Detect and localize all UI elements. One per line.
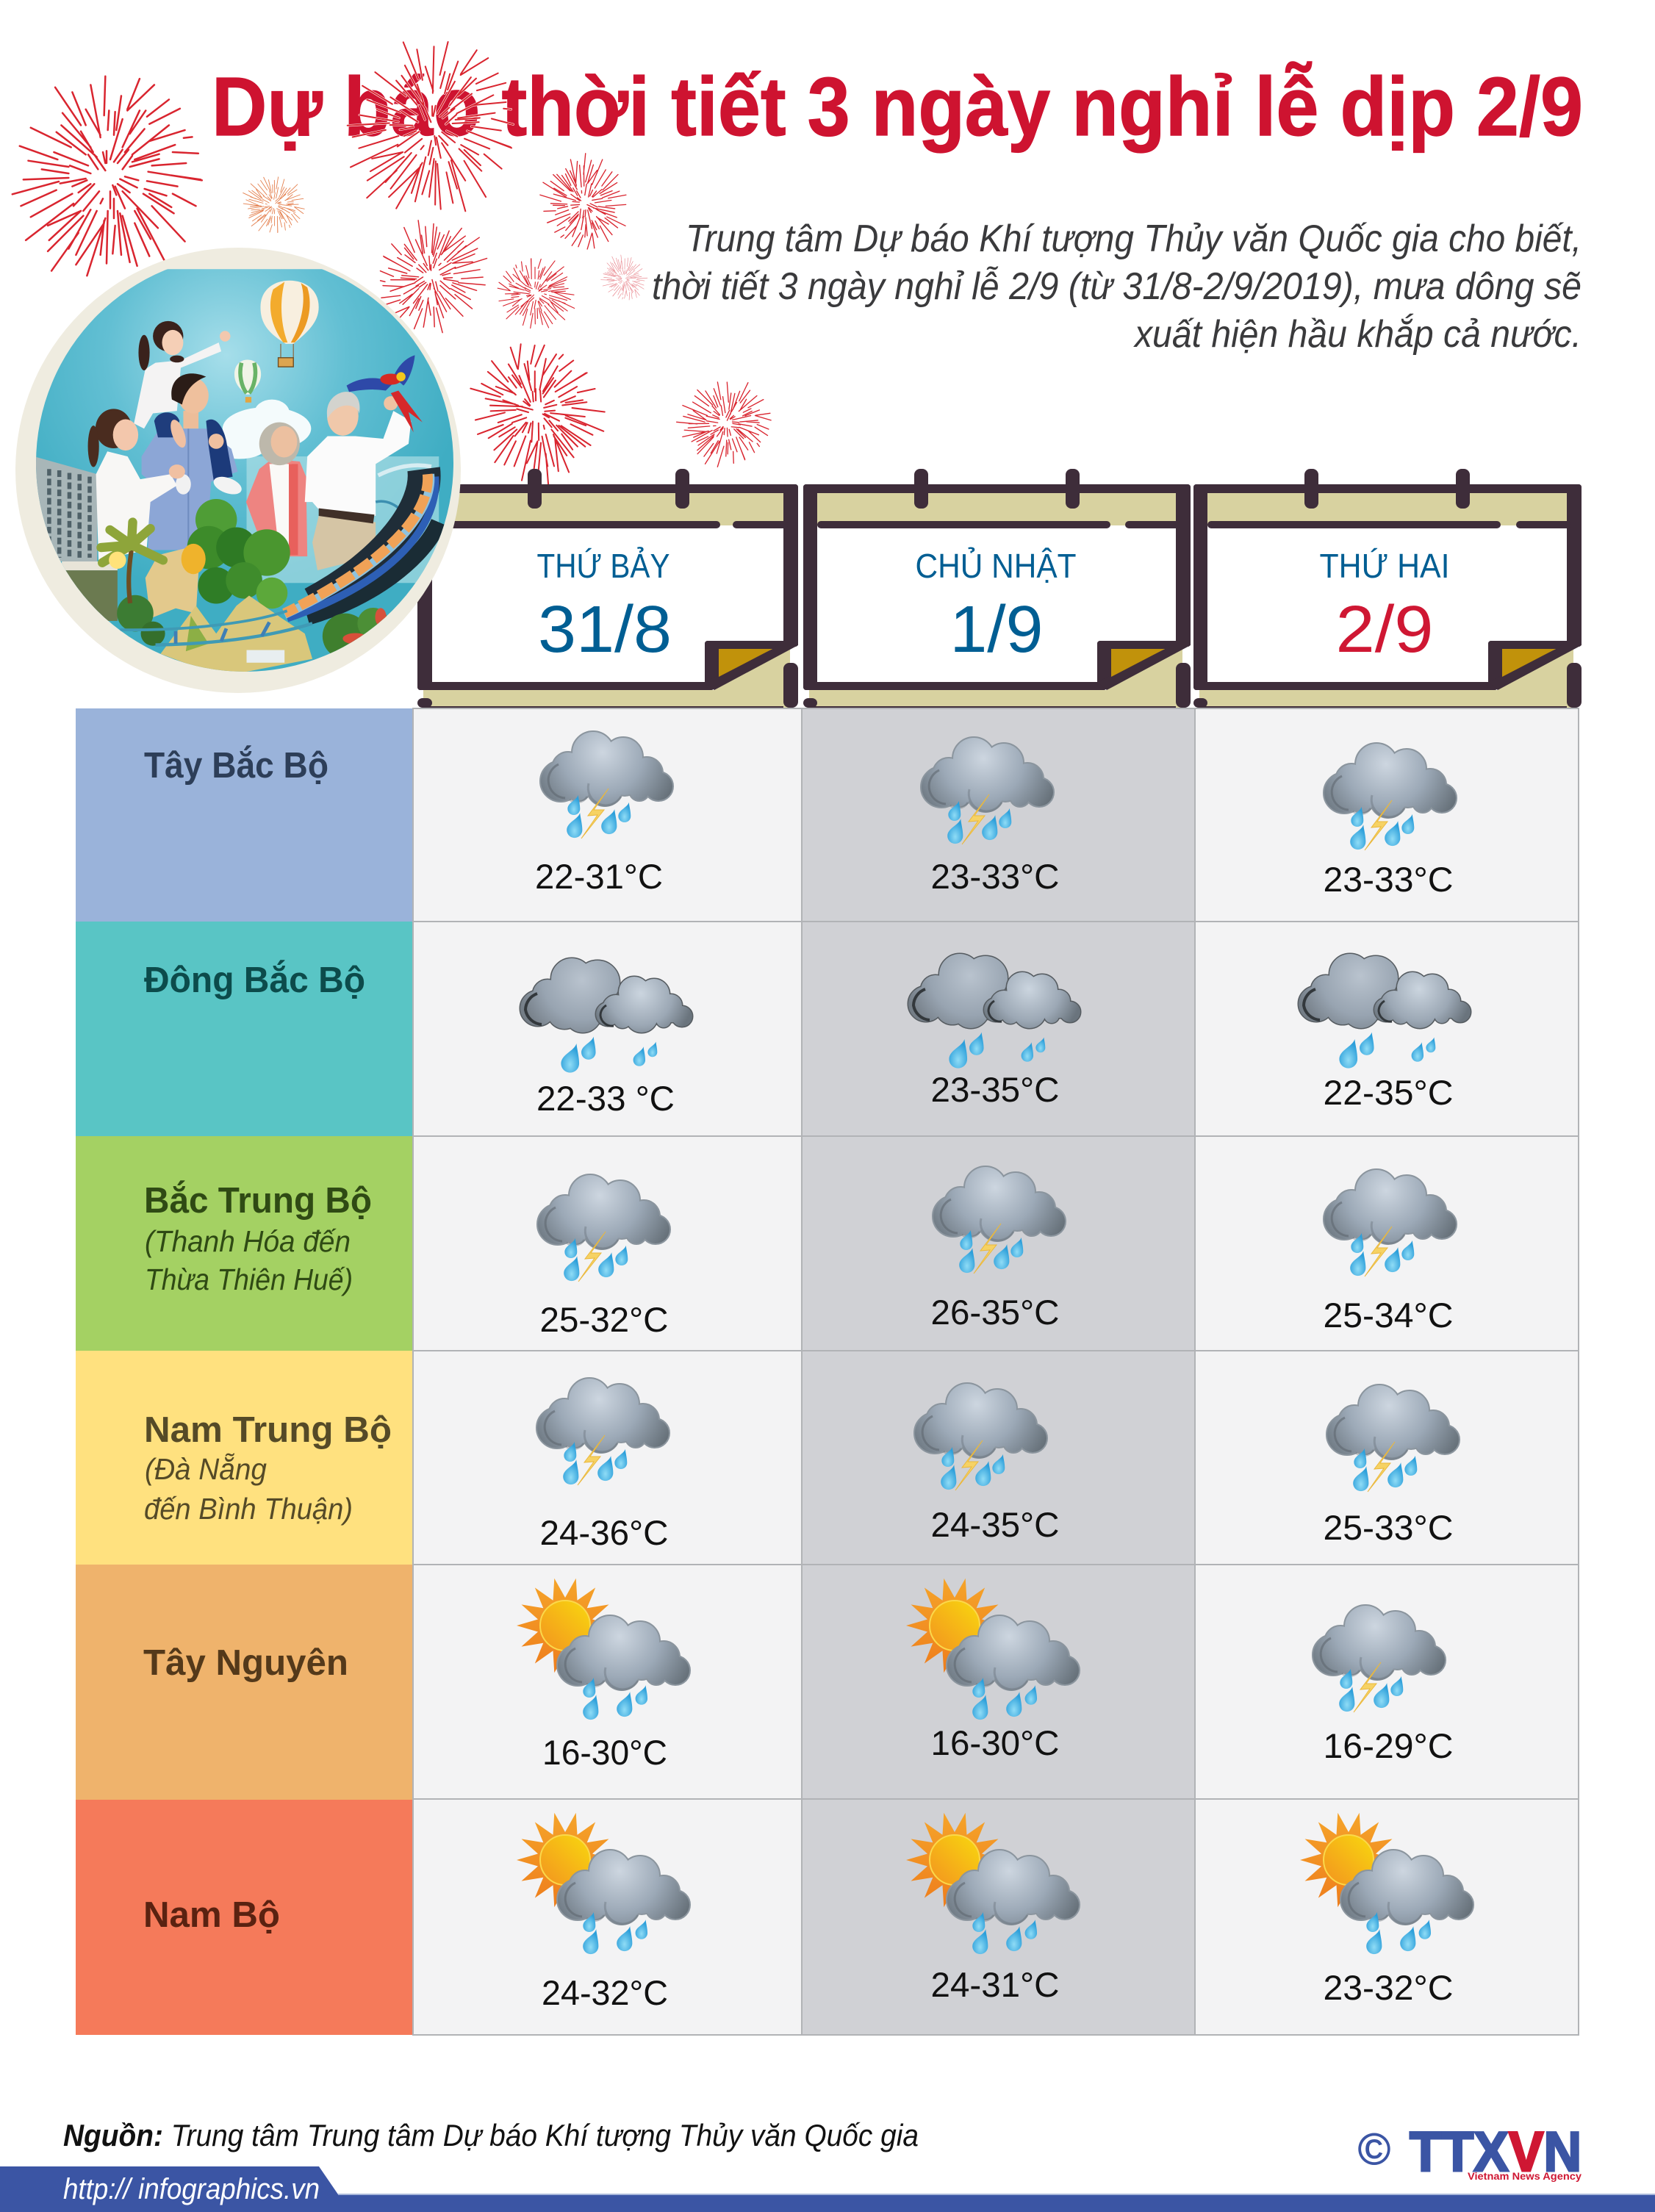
logo copyright: © (1358, 2125, 1390, 2174)
calendar day: Thứ Bảy: THỨ BẢY (536, 547, 670, 585)
icon: rain clouds (520, 958, 692, 1073)
temperatures row 5: 16-30°C (542, 1733, 667, 1772)
temperatures row 3: 25-32°C (539, 1300, 669, 1339)
label: Nam Bộ (76, 1800, 412, 2035)
photo: mother (88, 409, 185, 560)
label: Nam Trung Bộ: đến Bình Thuận) (144, 1492, 353, 1526)
label: Tây Nguyên: Tây Nguyên (143, 1643, 348, 1683)
footer url: http:// infographics.vn (63, 2173, 320, 2205)
calendar: Thứ Hai 2/9 (1193, 469, 1582, 708)
photo: rock and scroll (146, 544, 312, 677)
label: Nam Trung Bộ: Nam Trung Bộ (144, 1410, 392, 1450)
temperatures row 1: 23-33°C (1323, 860, 1454, 899)
label: Đông Bắc Bộ (76, 922, 412, 1136)
label: Tây Nguyên (76, 1565, 412, 1800)
temperatures row 2 (536, 1070, 1454, 1118)
icon: storm (922, 738, 1053, 844)
icon: sun and rain (906, 1579, 1079, 1720)
calendar date: 2/9: 2/9 (1336, 593, 1433, 667)
label: Bắc Trung Bộ: Bắc Trung Bộ (144, 1180, 372, 1221)
calendar: Thứ Bảy 31/8 (417, 469, 798, 708)
intro text (652, 218, 1582, 356)
icon: storm (915, 1384, 1047, 1490)
icon: storm (541, 732, 672, 839)
firework: center small (492, 252, 579, 335)
photo: trees (187, 499, 290, 608)
row labels (76, 708, 412, 2035)
fireworks (12, 25, 785, 505)
temperatures row 4: 24-35°C (930, 1505, 1060, 1544)
calendar day: Chủ Nhật: CHỦ NHẬT (916, 547, 1076, 585)
icons row: Nam Trung Bộ (537, 1379, 1459, 1492)
label: Nam Trung Bộ (76, 1351, 412, 1565)
footer bar (0, 2166, 1655, 2212)
photo: father (142, 373, 244, 550)
photo: rollercoaster (120, 465, 439, 645)
temperatures row 1 (535, 857, 1454, 899)
label: Nam Trung Bộ: (Đà Nẵng (145, 1452, 267, 1486)
icons row: Tây Nguyên (517, 1579, 1445, 1720)
icon: storm (1324, 744, 1456, 850)
temperatures row 4 (539, 1505, 1454, 1552)
logo TTXVN (1358, 2121, 1582, 2183)
photo: large balloon (260, 281, 319, 367)
temperatures row 4: 25-33°C (1323, 1508, 1454, 1547)
temperatures row 2: 22-35°C (1323, 1073, 1454, 1112)
source line: Nguồn: Trung tâm Trung tâm Dự báo Khí tượng Thủy văn Quốc gia (63, 2118, 919, 2152)
temperatures row 4: 24-36°C (539, 1513, 669, 1552)
temperatures row 1: 22-31°C (535, 857, 663, 896)
temperatures row 3 (539, 1293, 1454, 1339)
photo: parrot (347, 355, 423, 432)
icon: sun and rain (1300, 1813, 1473, 1954)
icon: storm (1313, 1606, 1445, 1712)
firework: far left (12, 76, 202, 276)
temperatures row 6: 23-32°C (1323, 1968, 1454, 2007)
firework: upper right (525, 143, 645, 263)
icon: sun and rain (517, 1813, 689, 1954)
firework: above first calendar right (666, 364, 785, 481)
temperatures row 2: 22-33 °C (536, 1079, 675, 1118)
icons row: Đông Bắc Bộ (520, 954, 1471, 1073)
photo: building (34, 456, 97, 563)
icons row: Tây Bắc Bộ (541, 732, 1456, 850)
temperatures row 1: 23-33°C (930, 857, 1060, 896)
photo: girl (134, 321, 230, 428)
icon: storm (1327, 1385, 1459, 1492)
temperatures row 6: 24-32°C (542, 1973, 668, 2012)
icons row: Nam Bộ (517, 1813, 1473, 1954)
icon: rain clouds (908, 954, 1080, 1069)
photo: grandmother (246, 423, 307, 556)
icon: storm (933, 1167, 1065, 1274)
photo: grandfather (305, 392, 411, 570)
temperatures row 2: 23-35°C (930, 1070, 1060, 1109)
icon: storm (1324, 1170, 1456, 1276)
firework: small orange (240, 171, 309, 237)
firework: above first calendar (444, 319, 628, 505)
photo: bottom right greenery (247, 608, 389, 663)
title: Dự báo thời tiết 3 ngày nghỉ lễ dịp 2/9 (212, 60, 1583, 153)
temperatures (535, 857, 1454, 2012)
temperatures row 5: 16-29°C (1323, 1726, 1454, 1765)
icon: storm (537, 1379, 669, 1485)
firework: pale small (594, 248, 654, 308)
intro line 1: Trung tâm Dự báo Khí tượng Thủy văn Quốc gia cho biết, (686, 218, 1582, 260)
calendar day: Thứ Hai: THỨ HAI (1320, 547, 1449, 585)
icon: sun and rain (906, 1813, 1079, 1954)
icon: storm (538, 1175, 669, 1282)
temperatures row 5 (542, 1723, 1454, 1772)
icons row: Bắc Trung Bộ (538, 1167, 1456, 1282)
grid cells (413, 708, 1579, 2035)
temperatures row 6 (542, 1965, 1454, 2012)
firework: over title (333, 25, 531, 229)
intro line 2: thời tiết 3 ngày nghỉ lễ 2/9 (từ 31/8-2/9/2019), mưa dông sẽ (652, 265, 1582, 308)
photo: small balloon (234, 360, 261, 403)
icon: rain clouds (1299, 954, 1471, 1069)
round family photo illustration (15, 248, 461, 693)
calendar date: 31/8: 31/8 (538, 593, 672, 667)
logo tagline: Vietnam News Agency (1468, 2170, 1582, 2182)
temperatures row 6: 24-31°C (930, 1965, 1060, 2004)
table (76, 708, 1579, 2035)
label: Tây Bắc Bộ (76, 708, 412, 922)
label: Bắc Trung Bộ: Thừa Thiên Huế) (145, 1263, 353, 1296)
label: Tây Bắc Bộ: Tây Bắc Bộ (144, 745, 329, 786)
label: Bắc Trung Bộ (76, 1136, 412, 1351)
label: Nam Bộ: Nam Bộ (143, 1895, 280, 1935)
label: Bắc Trung Bộ: (Thanh Hóa đến (145, 1224, 351, 1258)
logo wordmark: TTXVN (1410, 2121, 1582, 2183)
intro line 3: xuất hiện hầu khắp cả nước. (1132, 313, 1582, 356)
temperatures row 5: 16-30°C (930, 1723, 1060, 1762)
firework: center (364, 207, 500, 347)
label: Đông Bắc Bộ: Đông Bắc Bộ (144, 960, 365, 1000)
temperatures row 3: 26-35°C (930, 1293, 1060, 1332)
temperatures row 3: 25-34°C (1323, 1296, 1454, 1335)
calendar date: 1/9: 1/9 (949, 593, 1044, 667)
calendar: Chủ Nhật 1/9 (803, 469, 1191, 708)
icon: sun and rain (517, 1579, 689, 1720)
photo: garden left (62, 523, 165, 646)
